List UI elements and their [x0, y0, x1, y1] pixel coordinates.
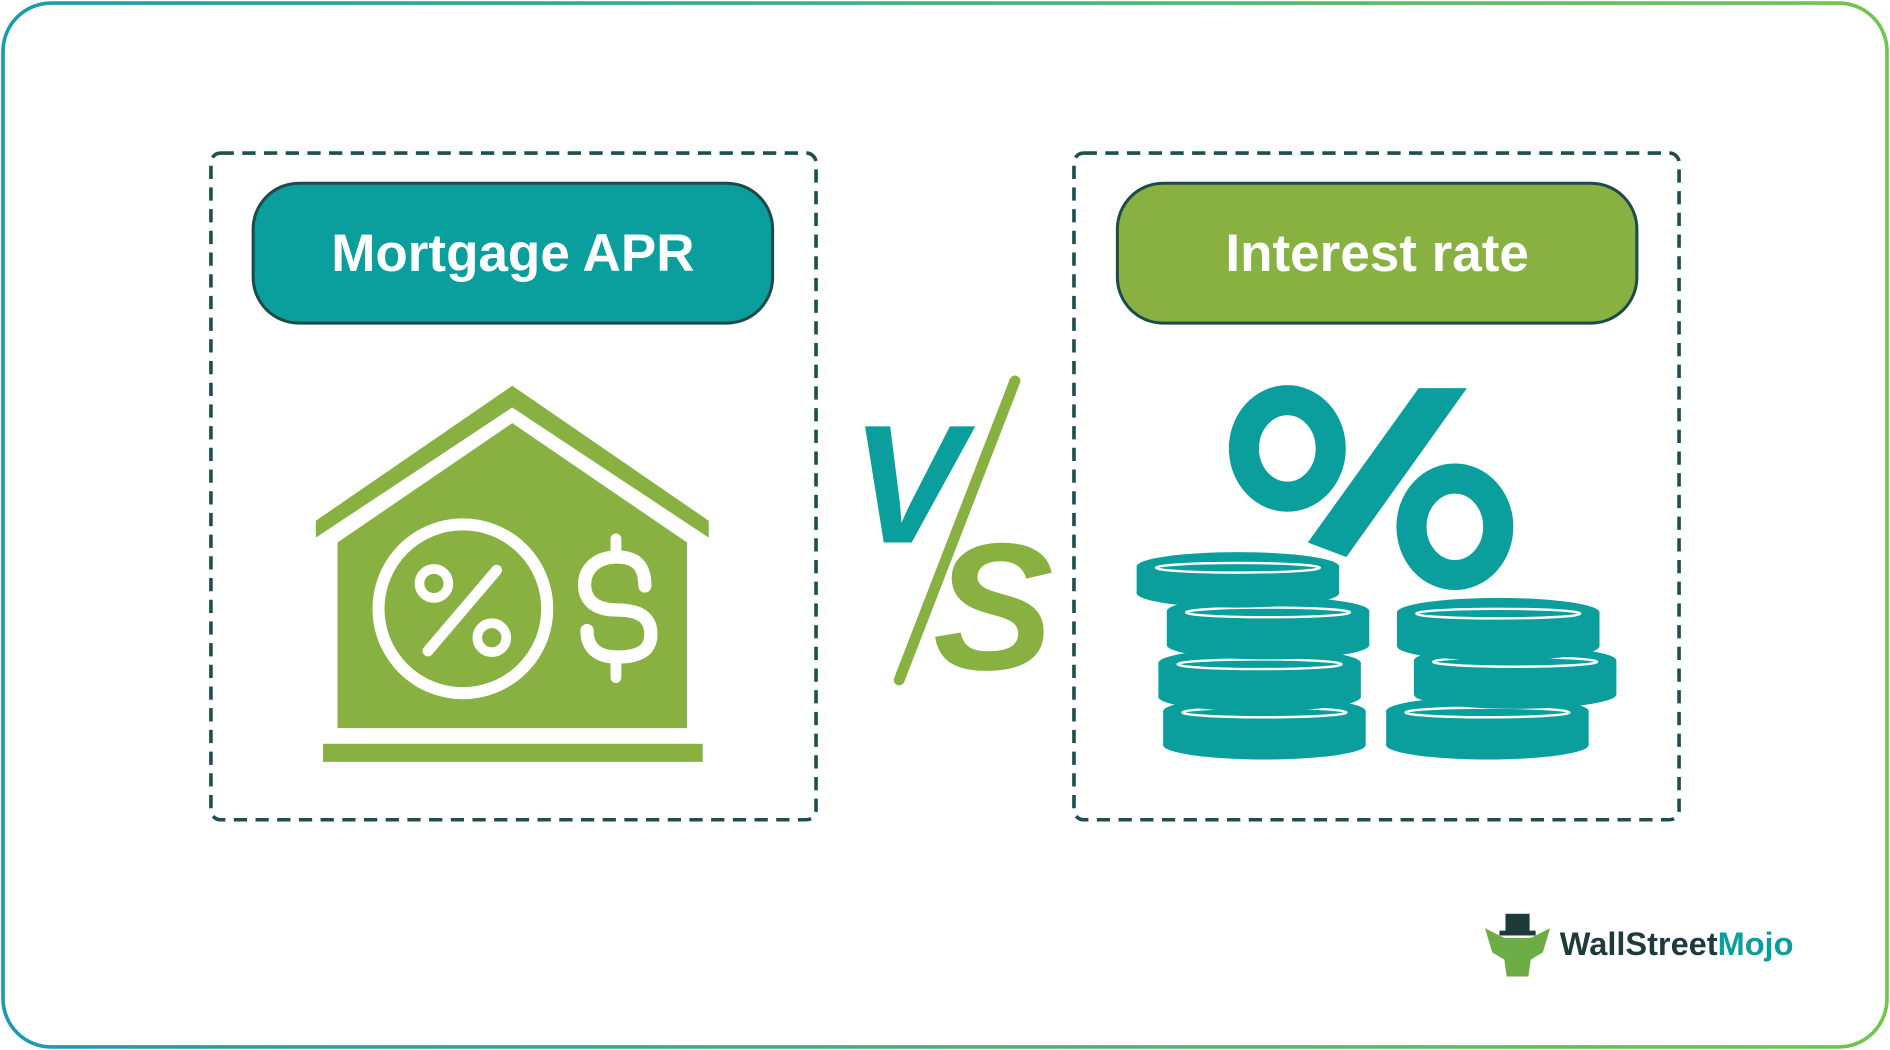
- heading pill: Interest rate: [1117, 183, 1637, 323]
- icon: percent over coin stacks: [1137, 388, 1616, 759]
- icon: VS: S: [933, 506, 1054, 708]
- panel: interest rate: [1074, 153, 1679, 820]
- icon: house with percent and dollar: [316, 386, 709, 762]
- logo: WallStreetMojo: [1485, 914, 1793, 976]
- icon: VS: V: [851, 389, 976, 578]
- panel: mortgage APR: [211, 153, 816, 820]
- heading pill: Mortgage APR: [253, 183, 773, 323]
- heading pill: Mortgage APR: Mortgage APR: [331, 224, 695, 283]
- logo: WallStreetMojo: WallStreetMojo: [1560, 926, 1793, 962]
- icon: VS: [851, 381, 1054, 708]
- heading pill: Interest rate: Interest rate: [1225, 224, 1529, 283]
